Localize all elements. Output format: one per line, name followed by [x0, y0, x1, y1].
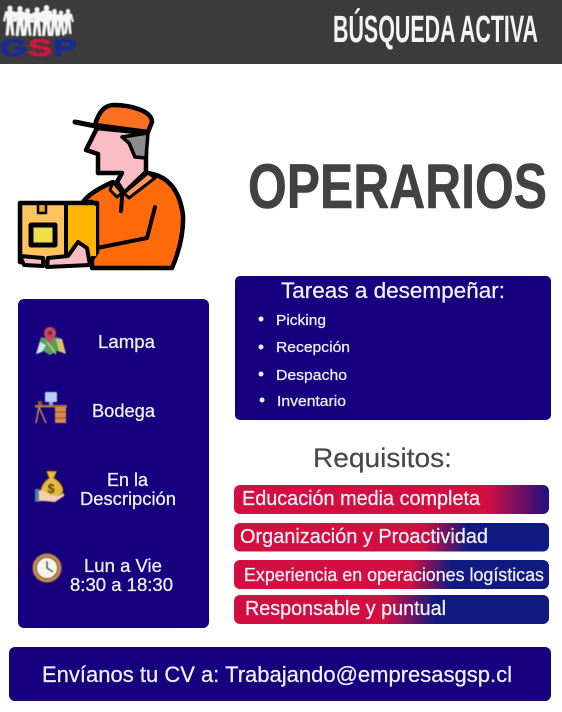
cap — [95, 105, 152, 132]
heading: tasks: Tareas a desempeñar: — [281, 278, 505, 303]
requirement: organization — [234, 523, 549, 552]
logo: GSP: S — [28, 35, 52, 62]
requirement: education: Educación media completa — [242, 488, 481, 510]
text: salary — [80, 470, 176, 509]
logo: GSP: G — [0, 35, 27, 62]
heading: requirements: Requisitos: — [313, 443, 452, 473]
panel: contact call to action — [9, 647, 551, 701]
shirt — [83, 173, 183, 268]
requirement: organization: Organización y Proactividad — [240, 526, 488, 548]
logo: GSP: P — [53, 35, 77, 62]
panel: tasks — [235, 276, 551, 420]
requirement: education — [234, 485, 549, 514]
task list: Inventario — [277, 393, 346, 410]
icon: map pin — [36, 327, 66, 355]
task list: Picking — [276, 312, 326, 329]
hands — [47, 242, 90, 267]
arm crease — [97, 207, 155, 248]
panel: contact call to action: Envíanos tu CV a: Trabajando@empresasgsp.cl — [42, 662, 512, 687]
hair — [122, 133, 148, 158]
text: salary: Descripción — [80, 489, 176, 509]
requirement: experience — [234, 560, 549, 589]
text: workplace: Bodega — [92, 401, 156, 421]
requirement: responsibility: Responsable y puntual — [245, 598, 446, 620]
text: schedule: 8:30 a 18:30 — [70, 575, 173, 595]
requirement: experience: Experiencia en operaciones logísticas — [244, 565, 544, 585]
text: salary: En la — [107, 470, 149, 490]
task list — [258, 312, 350, 410]
task list: Recepción — [276, 339, 350, 356]
icon: worker carrying box — [20, 105, 183, 268]
text: location: Lampa — [98, 332, 156, 352]
icon: desk — [35, 392, 67, 423]
neck and face — [86, 128, 146, 193]
text: schedule — [70, 556, 173, 595]
collar — [110, 173, 155, 198]
text: schedule: Lun a Vie — [84, 556, 162, 576]
logo: GSP — [0, 5, 77, 62]
requirement: responsibility — [234, 595, 549, 624]
box — [20, 203, 97, 262]
icon: money bag in hand — [35, 471, 64, 502]
panel: job details — [18, 299, 209, 628]
icon: clock — [32, 554, 62, 582]
icon: money bag in hand: $ — [48, 481, 56, 496]
task list: Despacho — [276, 367, 347, 384]
header bar — [0, 0, 562, 64]
